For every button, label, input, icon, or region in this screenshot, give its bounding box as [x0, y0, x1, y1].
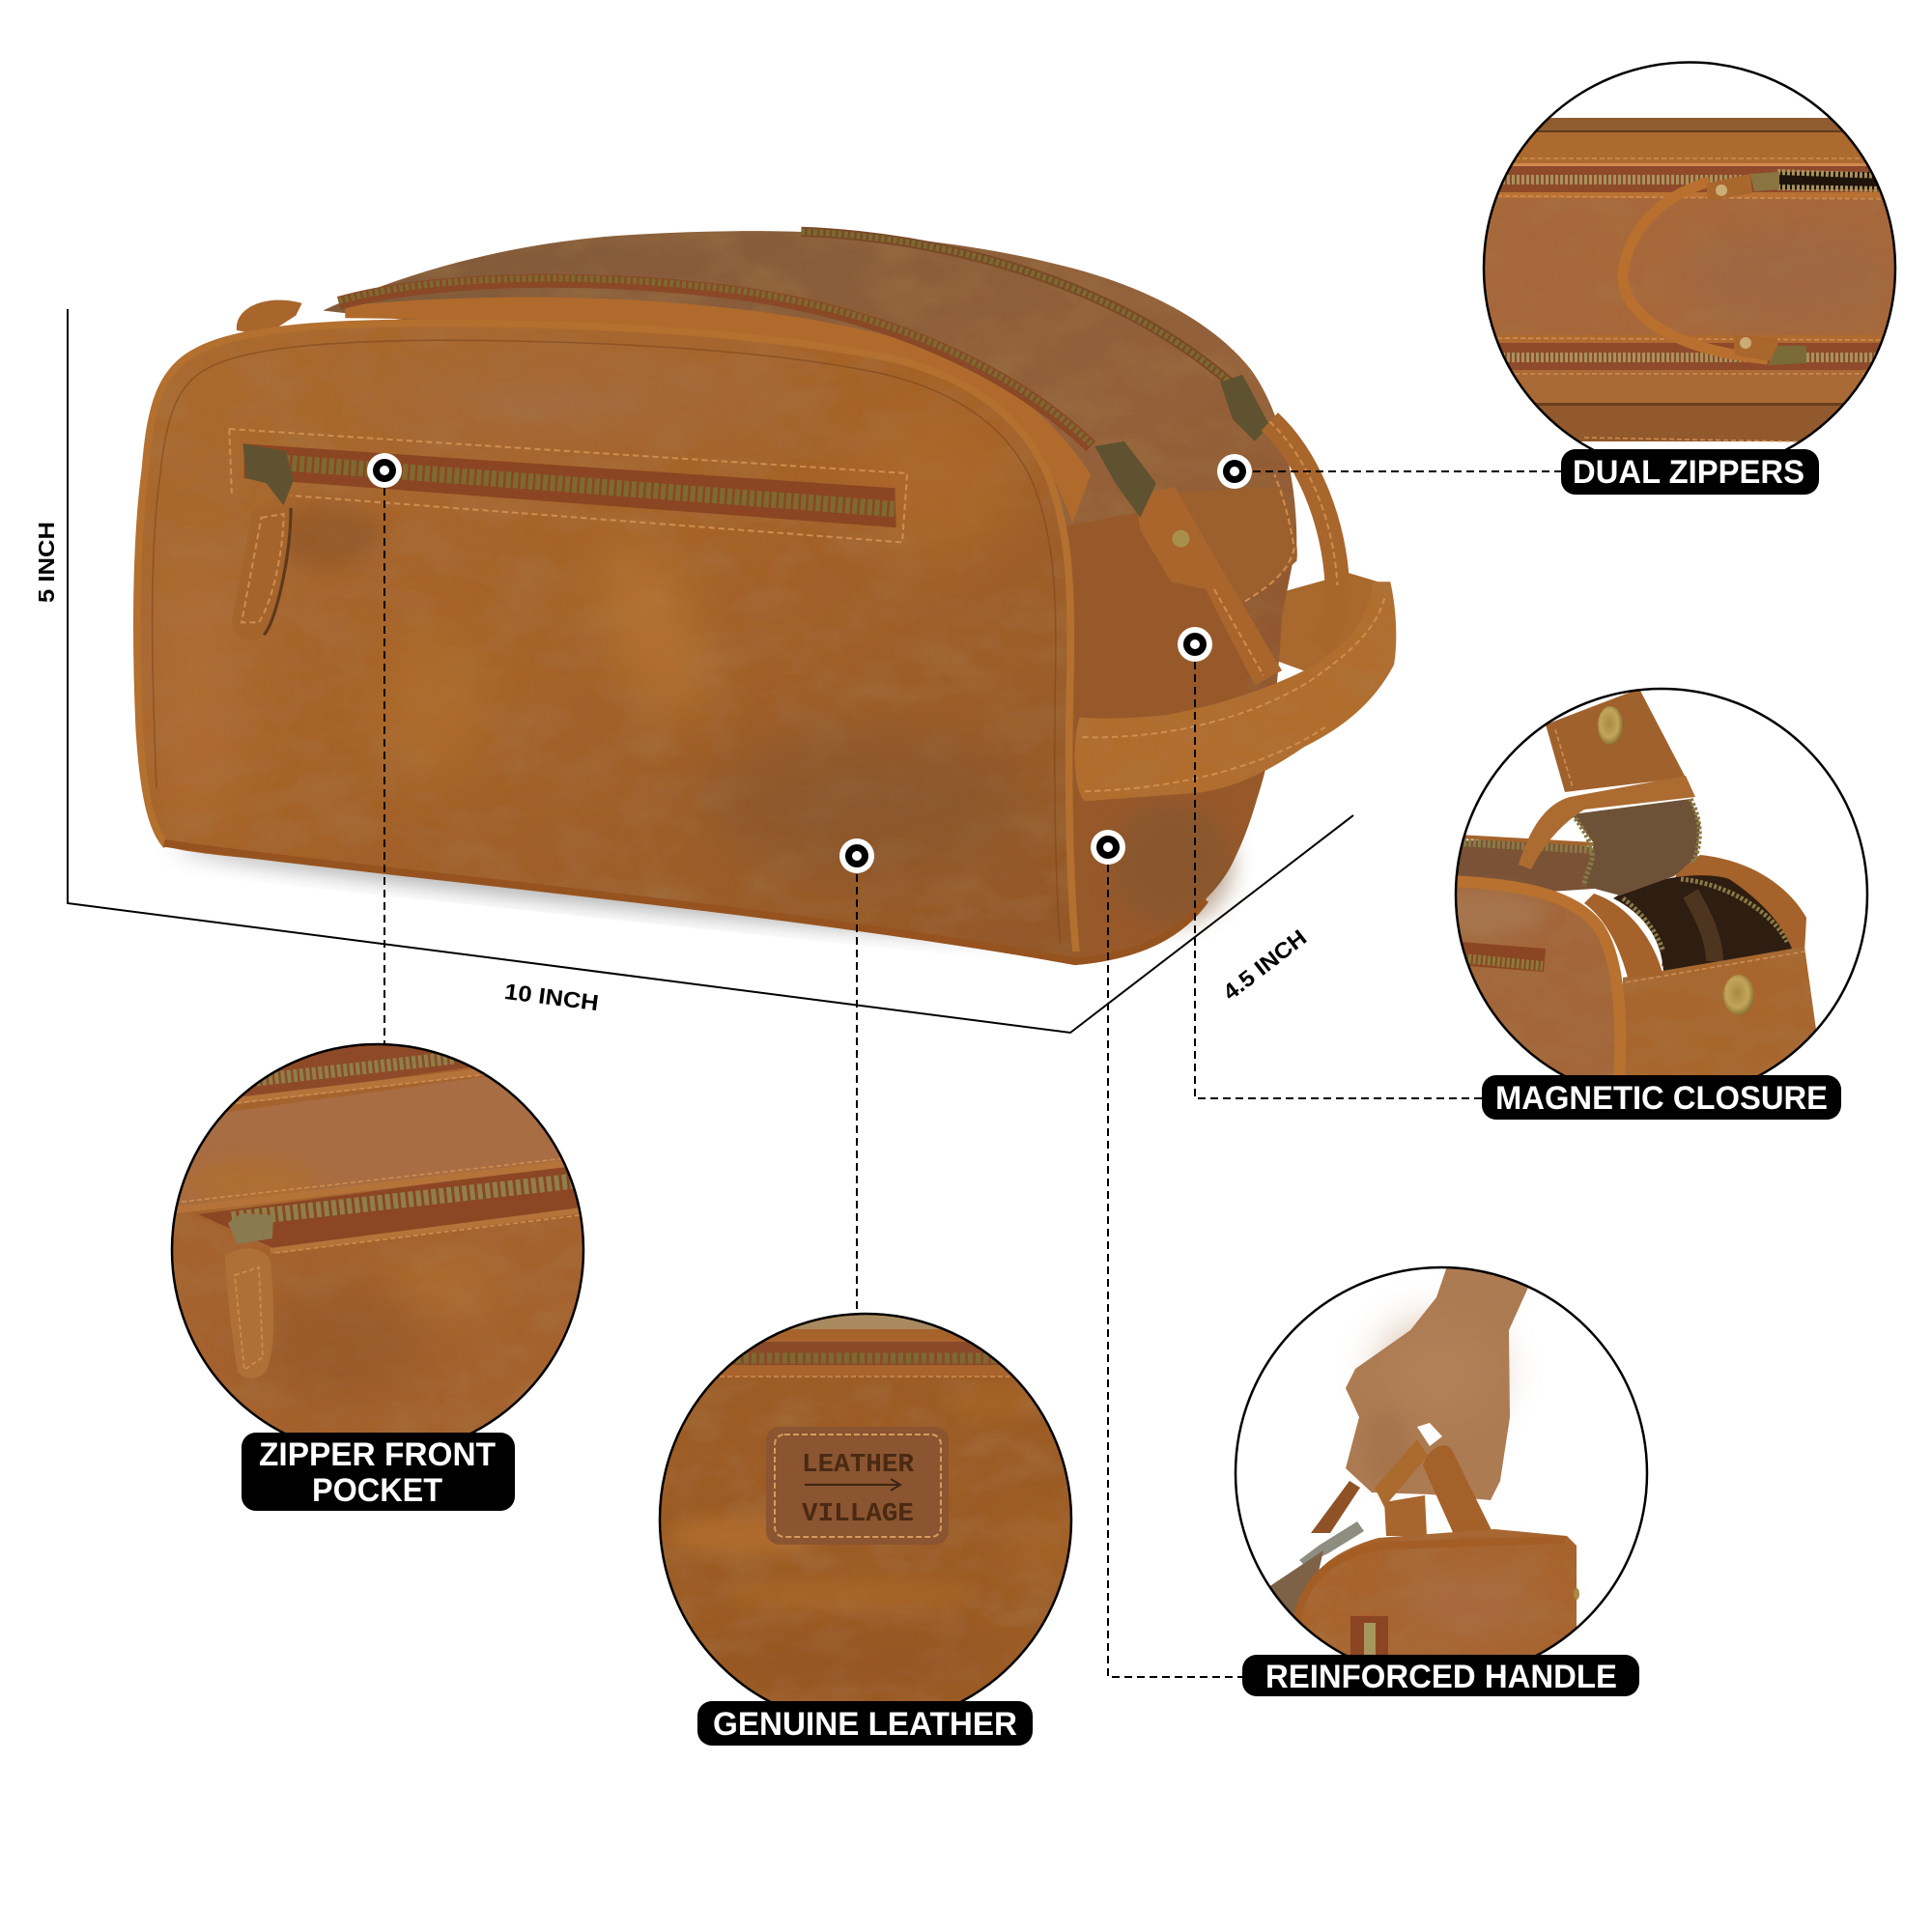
dashed leader: magnetic closure [1195, 662, 1482, 1098]
front panel [137, 323, 1076, 958]
dimension label: 4.5 inch: 4.5 INCH [1218, 924, 1311, 1005]
front pocket zipper [229, 429, 907, 542]
flap lining [1572, 799, 1700, 895]
bag body [1296, 1529, 1577, 1662]
dimension label: 5 inch: 5 INCH [34, 522, 59, 603]
lower leather highlights [386, 1256, 502, 1314]
strap rivet [1172, 530, 1189, 548]
upper leather area [178, 1076, 562, 1206]
rear right rim [1662, 855, 1806, 966]
top gusset [790, 1315, 941, 1329]
rivet [1574, 1588, 1579, 1600]
marker: dual zippers [1217, 454, 1252, 489]
main zipper tape [198, 1164, 582, 1248]
label: reinforced handle: REINFORCED HANDLE [1265, 1659, 1617, 1695]
rear body [1458, 839, 1594, 892]
main top zipper [339, 281, 1091, 446]
dimension line: height, width and depth guide [68, 309, 1353, 1033]
upper snap [1598, 706, 1623, 745]
pocket zipper slider [242, 443, 294, 505]
mini zipper [1350, 1616, 1388, 1660]
panel: genuine leather close-up [659, 1312, 1072, 1701]
rear loop strap [237, 300, 302, 335]
upper strap tab [1706, 174, 1752, 201]
panel: zipper front pocket close-up [170, 1043, 585, 1433]
label: zipper front pocket [242, 1433, 515, 1511]
label: zipper front pocket: ZIPPER FRONT [259, 1436, 496, 1473]
front face [1457, 887, 1615, 1075]
rim band around opening [1584, 894, 1663, 978]
front zipper pull strap [1135, 487, 1282, 685]
handle strap [1423, 1445, 1494, 1539]
marker: magnetic closure [1178, 627, 1212, 662]
marker: reinforced handle [1091, 830, 1125, 865]
zipper teeth [736, 1352, 997, 1364]
panel: reinforced handle close-up [1236, 1261, 1647, 1679]
back strap [1384, 1495, 1427, 1536]
upper tab rivet [1716, 185, 1727, 196]
hand [1346, 1261, 1536, 1500]
front piping [1449, 881, 1620, 1082]
label: genuine leather: GENUINE LEATHER [713, 1706, 1017, 1743]
interior [1613, 875, 1792, 972]
strap upper flap [1546, 689, 1686, 792]
back zipper [801, 232, 1233, 384]
brand patch: VILLAGE [802, 1500, 914, 1529]
zipper pull strap two [1311, 1481, 1360, 1533]
side handle [1075, 582, 1396, 801]
label: magnetic closure: MAGNETIC CLOSURE [1495, 1080, 1828, 1117]
back zipper pull strap [1269, 421, 1338, 647]
dimension label: 10 inch: 10 INCH [503, 979, 600, 1015]
brand patch [766, 1427, 949, 1545]
lower strap tab [1733, 335, 1779, 362]
zipper pull [225, 1248, 273, 1378]
dashed leader: reinforced handle [1108, 865, 1242, 1677]
lower tab rivet [1740, 337, 1751, 349]
gusset [1265, 1550, 1323, 1657]
zipper pull strap one [1375, 1439, 1428, 1507]
side flap [1158, 487, 1297, 604]
brand patch: LEATHER [802, 1451, 915, 1480]
zipper loop handle [1623, 182, 1768, 359]
zipper slider [228, 1213, 273, 1244]
front zipper slider [1094, 441, 1156, 518]
mini pocket zipper [1461, 942, 1546, 972]
front panel piping [137, 323, 1076, 952]
strap band [1519, 776, 1695, 869]
circle outline [660, 1314, 1071, 1725]
main product: leather toiletry bag [137, 231, 1396, 961]
pocket zipper pull [232, 505, 294, 640]
dashed leader: dual zippers [1253, 470, 1561, 472]
circle outline [172, 1044, 583, 1456]
circle outline [1456, 689, 1867, 1100]
back handle section [1238, 573, 1378, 671]
zipper hardware [1299, 1521, 1364, 1565]
orange band along front seam [345, 298, 1091, 524]
circle outline [1236, 1267, 1647, 1679]
finger gap [1417, 1423, 1442, 1446]
upper zipper [242, 1045, 469, 1097]
marker: genuine leather [839, 838, 874, 873]
bag body: top gusset and side panel [323, 231, 1296, 961]
side panel [1623, 947, 1818, 1082]
panel: dual zippers close-up [1478, 62, 1903, 473]
lower zipper slider [1768, 346, 1806, 365]
circle outline [1484, 62, 1895, 473]
marker: zipper front pocket [367, 453, 402, 488]
label: zipper front pocket: POCKET [312, 1472, 442, 1509]
label: dual zippers: DUAL ZIPPERS [1573, 454, 1804, 491]
dashed leader: genuine leather [856, 874, 858, 1314]
lower snap [1723, 975, 1754, 1015]
back zipper slider [1220, 375, 1269, 441]
dashed leader: zipper front pocket [384, 488, 385, 1043]
upper zipper slider [1750, 172, 1779, 191]
panel: magnetic closure close-up [1455, 688, 1868, 1075]
